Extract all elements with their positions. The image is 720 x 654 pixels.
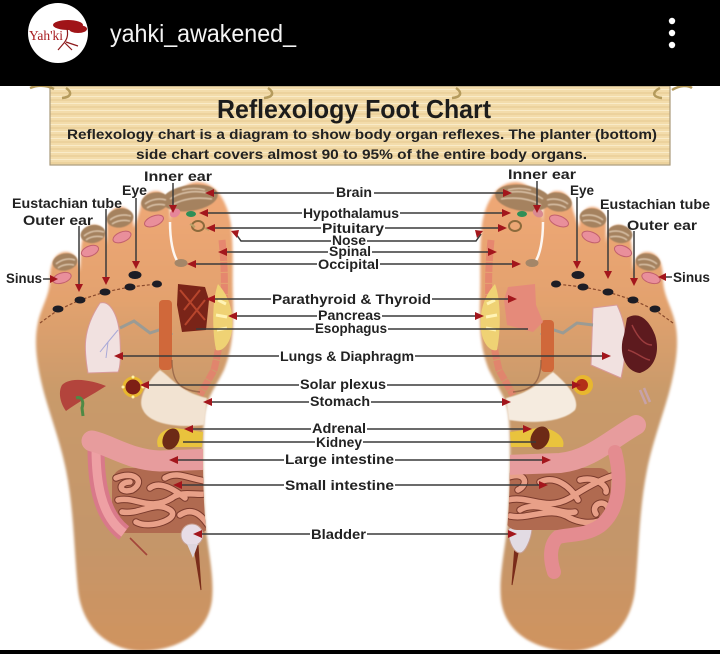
label: Inner ear right [508,167,577,213]
description: Reflexology chart is a diagram to show body organ reflexes. The planter (bottom) [67,127,657,142]
label: Small intestine [173,478,548,493]
corner ornaments [30,86,692,98]
label: Eustachian tube right: Eustachian tube [600,197,711,212]
occipital [174,259,188,267]
label: Pancreas [228,308,484,323]
esophagus [159,300,172,370]
right large intestine [505,425,636,465]
eye and ear chain [40,271,162,323]
label: Adrenal [184,421,532,436]
label: Sinus right: Sinus [673,270,710,285]
label: Solar plexus [140,377,581,392]
label: Hypothalamus: Hypothalamus [303,206,399,221]
label: Hypothalamus [199,206,511,221]
heart [622,315,657,373]
label: Small intestine: Small intestine [285,478,395,493]
label: Outer ear right: Outer ear [627,218,698,233]
label: Eye right: Eye [570,183,594,198]
label: Pancreas: Pancreas [318,308,381,323]
avatar: Yah'ki [29,29,63,44]
label: Eye right [570,183,594,269]
liver [60,380,106,411]
label: Brain [205,185,512,200]
adrenal and kidney [157,426,203,452]
label: Large intestine: Large intestine [285,452,395,467]
label: Eye left [122,183,148,269]
parathyroid and thyroid [177,284,209,332]
label: Outer ear left: Outer ear [23,213,94,228]
label: Kidney: Kidney [316,435,362,450]
right foot sole [480,182,677,651]
label: Eye left: Eye [122,183,148,198]
right small intestine [505,468,612,530]
bladder [181,524,203,590]
label: Lungs & Diaphragm: Lungs & Diaphragm [280,349,414,364]
label: Inner ear left [144,169,213,213]
label: Outer ear left [23,213,94,292]
label: Nose [231,230,483,248]
label: Nose: Nose [332,233,367,248]
inner ear, hypothalamus, pituitary [168,207,209,231]
label: Occipital [187,257,521,272]
pancreas [213,284,232,350]
right foot mirrored organs [481,181,673,585]
top profile bar [0,0,720,86]
label: Occipital: Occipital [318,257,379,272]
label: Pituitary [206,221,507,236]
toe pads [51,213,165,286]
menu dots [669,18,675,48]
label: Large intestine [169,452,551,467]
center labels with arrows [114,185,611,542]
wooden board [50,86,670,165]
right foot illustration [480,181,677,651]
label: Esophagus: Esophagus [315,321,387,336]
lung [85,303,120,373]
label: Brain: Brain [336,185,372,200]
label: Inner ear left: Inner ear [144,169,213,184]
label: Solar plexus: Solar plexus [300,377,386,392]
label: Spinal: Spinal [329,244,371,259]
label: Outer ear right [627,218,698,286]
faint toe-side marking [640,388,650,404]
label: Stomach [203,394,511,409]
label: Bladder: Bladder [311,527,367,542]
left foot toe labels [6,169,213,292]
right solar plexus [573,375,593,395]
username: yahki_awakened_ [110,20,297,48]
label: Inner ear right: Inner ear [508,167,577,182]
title: Reflexology Foot Chart [217,94,491,124]
solar plexus [122,376,144,398]
label: Parathyroid & Thyroid: Parathyroid & Thyroid [272,292,431,307]
label: Stomach: Stomach [310,394,370,409]
bottom black bar [0,650,720,654]
label: Sinus left: Sinus [6,271,42,286]
large intestine [92,441,215,555]
title banner [30,86,692,165]
small intestine [112,468,212,533]
brain reflex zones on toes [51,181,220,273]
title banner: side chart covers almost 90 to 95% of the entire body organs. [136,147,587,162]
avatar [28,3,88,63]
stomach [141,370,207,426]
label: Eustachian tube left [12,196,123,285]
spine strip [200,240,224,395]
trachea [120,321,172,335]
label: Eustachian tube left: Eustachian tube [12,196,123,211]
left foot sole [36,182,233,651]
label: Adrenal: Adrenal [312,421,366,436]
right foot toe labels [508,167,711,286]
label: Parathyroid & Thyroid [206,292,517,307]
label: Lungs & Diaphragm [114,349,611,364]
label: Eustachian tube right [600,197,711,279]
left foot illustration [36,181,233,651]
label: Spinal [218,244,497,259]
label: Pituitary: Pituitary [322,221,385,236]
label: Bladder [193,527,517,542]
